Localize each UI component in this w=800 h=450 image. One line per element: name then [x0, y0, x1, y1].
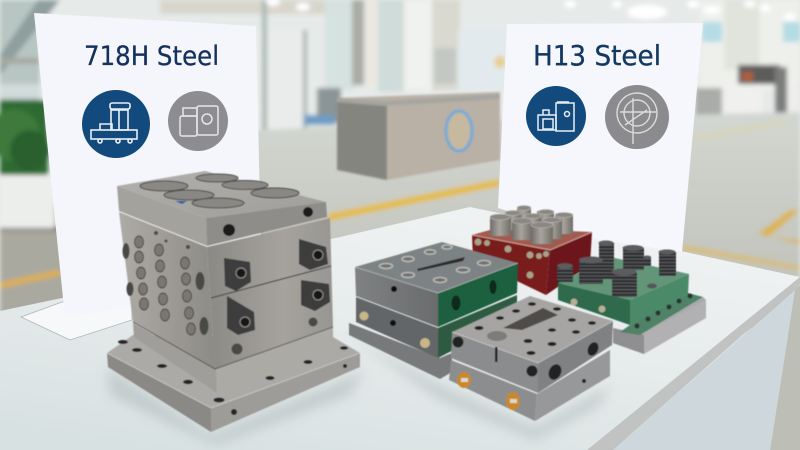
mould stack: green plate with threaded pins: [557, 240, 706, 354]
icon: mould blocks: [168, 91, 228, 151]
mould stack: red plate with pins: [472, 206, 592, 295]
mould stack: 718H steel: [107, 171, 360, 432]
cabinet logo: [446, 111, 472, 151]
sign: H13 Steel: [498, 23, 703, 252]
sign base: [21, 302, 132, 340]
mould stack: grey and green block: [349, 242, 518, 379]
shadows under blocks: [107, 335, 610, 445]
icon: machine press: [82, 90, 150, 158]
sign board: [498, 23, 703, 252]
steel pins: [490, 206, 573, 244]
sign title: 718H Steel: [84, 41, 219, 72]
hose connectors: [224, 239, 330, 335]
factory background: [0, 0, 800, 330]
background cabinet: [337, 92, 500, 180]
main body: [119, 212, 333, 369]
sign board: [34, 13, 261, 318]
threaded pins: [557, 240, 676, 297]
base plate: [107, 335, 360, 432]
cooling ports: [134, 236, 196, 335]
icon: containers: [526, 86, 586, 146]
mould stack: front steel block: [449, 296, 613, 421]
upper block: [355, 267, 438, 327]
base: [349, 323, 452, 379]
lower block: [356, 297, 438, 358]
display table: [0, 207, 800, 450]
lower plate: [133, 323, 333, 393]
icon: target: [605, 85, 669, 149]
top plate: [117, 171, 327, 246]
sign title: H13 Steel: [533, 39, 661, 72]
sign: 718H Steel: [21, 13, 261, 340]
